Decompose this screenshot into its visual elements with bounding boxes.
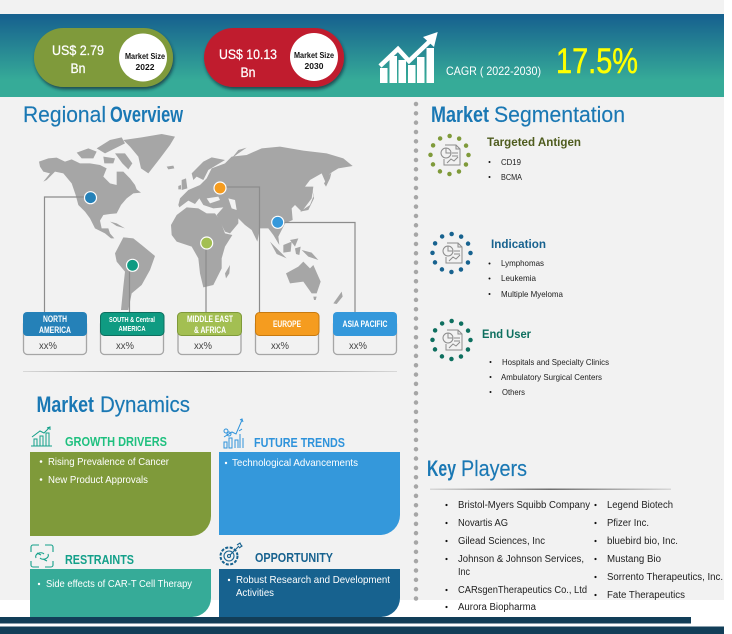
icon: indication dots bbox=[432, 234, 470, 272]
CAGR value: 17.5% bbox=[556, 42, 638, 81]
market size 2030 pill: Bn bbox=[240, 64, 256, 80]
panel: growth drivers: New Product Approvals bbox=[48, 474, 148, 486]
panel: opportunity bbox=[219, 569, 400, 617]
heading: market segmentation: Segmentation bbox=[494, 102, 625, 127]
region card: europe: EUROPE bbox=[273, 319, 301, 329]
dotted vertical divider bbox=[414, 104, 418, 606]
panel: opportunity: Robust Research and Development bbox=[236, 574, 390, 586]
region card: europe bbox=[256, 312, 319, 354]
CAGR label: CAGR ( 2022-2030) bbox=[446, 64, 541, 78]
list: key players left column: CARsgenTherapeutics Co., Ltd bbox=[458, 585, 587, 596]
region card: north america: NORTH bbox=[43, 314, 67, 324]
list: key players left column bbox=[445, 500, 590, 613]
region card: asia pacific: xx% bbox=[349, 340, 367, 352]
icon: end user dots bbox=[432, 321, 470, 359]
list: end user: Others bbox=[502, 387, 525, 397]
region card: north america bbox=[23, 312, 87, 354]
label: restraints: RESTRAINTS bbox=[65, 552, 134, 567]
list: key players left column: Johnson & Johnson Services, bbox=[458, 554, 584, 565]
footer bars bbox=[0, 617, 724, 634]
icon: restraints bbox=[31, 545, 53, 567]
region card: europe: xx% bbox=[271, 340, 289, 352]
icon: targeted antigen dots bbox=[430, 136, 468, 174]
list: key players right column: Fate Therapeutics bbox=[607, 590, 685, 601]
icon: growth drivers bbox=[31, 427, 52, 446]
list: key players right column: Legend Biotech bbox=[607, 500, 673, 511]
region card: middle east and africa bbox=[178, 312, 242, 354]
list: key players left column: Aurora Biopharma bbox=[458, 602, 536, 613]
list: key players right column: Mustang Bio bbox=[607, 554, 661, 565]
region card: middle east and africa: MIDDLE EAST bbox=[187, 314, 233, 324]
panel: opportunity: Activities bbox=[236, 587, 274, 599]
label: future trends: FUTURE TRENDS bbox=[254, 435, 345, 450]
heading: market dynamics bbox=[36, 392, 190, 417]
label: targeted antigen: Targeted Antigen bbox=[487, 135, 581, 149]
panel: restraints bbox=[30, 569, 211, 617]
marker: asia pacific bbox=[272, 216, 284, 228]
marker: north america bbox=[84, 192, 96, 204]
list: key players left column: Bristol-Myers Squibb Company bbox=[458, 500, 590, 511]
region card: middle east and africa: & AFRICA bbox=[194, 325, 226, 335]
market size 2030 pill: Market Size bbox=[294, 50, 334, 60]
label: opportunity: OPPORTUNITY bbox=[255, 550, 333, 565]
heading: regional overview: Overview bbox=[110, 102, 184, 127]
heading: key players: Key bbox=[427, 456, 457, 481]
region card: middle east and africa: xx% bbox=[194, 340, 212, 352]
list: indication: Leukemia bbox=[501, 273, 536, 283]
heading: market segmentation: Market bbox=[431, 102, 490, 127]
list: key players right column bbox=[594, 500, 723, 601]
list: end user bbox=[490, 357, 609, 397]
list: targeted antigen bbox=[488, 157, 522, 182]
world map bbox=[39, 134, 353, 310]
list: end user: Hospitals and Specialty Clinics bbox=[502, 357, 609, 367]
market size 2022 pill: US$ 2.79 bbox=[52, 42, 104, 58]
region card: south and central america: AMERICA bbox=[118, 324, 146, 333]
marker: south america bbox=[126, 259, 138, 271]
region card: north america: AMERICA bbox=[39, 325, 71, 335]
heading: market segmentation bbox=[431, 102, 625, 127]
market size 2030 pill: 2030 bbox=[305, 61, 324, 71]
region card: south and central america bbox=[100, 312, 164, 354]
icon: future trends bbox=[224, 419, 243, 448]
region card: north america: xx% bbox=[39, 340, 57, 352]
panel: future trends: Technological Advancements bbox=[232, 457, 358, 469]
header band bbox=[0, 14, 724, 97]
list: key players left column: Novartis AG bbox=[458, 518, 508, 529]
heading: market dynamics: Dynamics bbox=[100, 392, 190, 417]
marker: middle east and africa bbox=[201, 237, 213, 249]
list: indication bbox=[488, 258, 563, 299]
label: indication: Indication bbox=[491, 237, 546, 251]
label: growth drivers: GROWTH DRIVERS bbox=[65, 434, 167, 449]
list: key players left column: Gilead Sciences, Inc bbox=[458, 536, 545, 547]
list: key players left column: Inc bbox=[458, 567, 470, 578]
market size 2022 pill: 2022 bbox=[136, 62, 155, 72]
list: targeted antigen: BCMA bbox=[501, 172, 522, 182]
market size 2022 pill: Market Size bbox=[125, 51, 165, 61]
list: key players right column: Sorrento Therapeutics, Inc. bbox=[607, 572, 723, 583]
region card: asia pacific: ASIA PACIFIC bbox=[342, 319, 388, 329]
marker: europe bbox=[214, 182, 226, 194]
market size 2030 pill bbox=[204, 28, 344, 87]
panel: future trends bbox=[219, 452, 400, 535]
heading: key players: Players bbox=[461, 456, 527, 481]
region card: south and central america: xx% bbox=[116, 340, 134, 352]
heading: regional overview bbox=[23, 102, 184, 127]
list: end user: Ambulatory Surgical Centers bbox=[501, 372, 602, 382]
panel: restraints: Side effects of CAR-T Cell Therapy bbox=[46, 578, 193, 590]
region card: asia pacific bbox=[333, 312, 397, 354]
list: key players right column: bluebird bio, Inc. bbox=[607, 536, 678, 547]
panel: growth drivers: Rising Prevalence of Cancer bbox=[48, 456, 169, 468]
list: indication: Lymphomas bbox=[501, 258, 544, 268]
market size 2022 pill: Bn bbox=[70, 60, 86, 76]
heading: market dynamics: Market bbox=[36, 392, 95, 417]
list: key players right column: Pfizer Inc. bbox=[607, 518, 649, 529]
panel: growth drivers bbox=[30, 452, 211, 536]
list: targeted antigen: CD19 bbox=[501, 157, 521, 167]
icon: growth chart arrow bbox=[380, 32, 438, 83]
connector lines bbox=[44, 187, 355, 312]
label: end user: End User bbox=[482, 327, 531, 341]
market size 2022 pill bbox=[34, 28, 173, 87]
white footer area bbox=[0, 600, 732, 634]
icon: opportunity bbox=[220, 543, 242, 564]
market size 2030 pill: US$ 10.13 bbox=[219, 46, 277, 62]
heading: regional overview: Regional bbox=[23, 102, 106, 127]
heading: key players bbox=[427, 456, 527, 481]
region card: south and central america: SOUTH & Central bbox=[109, 315, 155, 324]
list: indication: Multiple Myeloma bbox=[501, 289, 563, 299]
